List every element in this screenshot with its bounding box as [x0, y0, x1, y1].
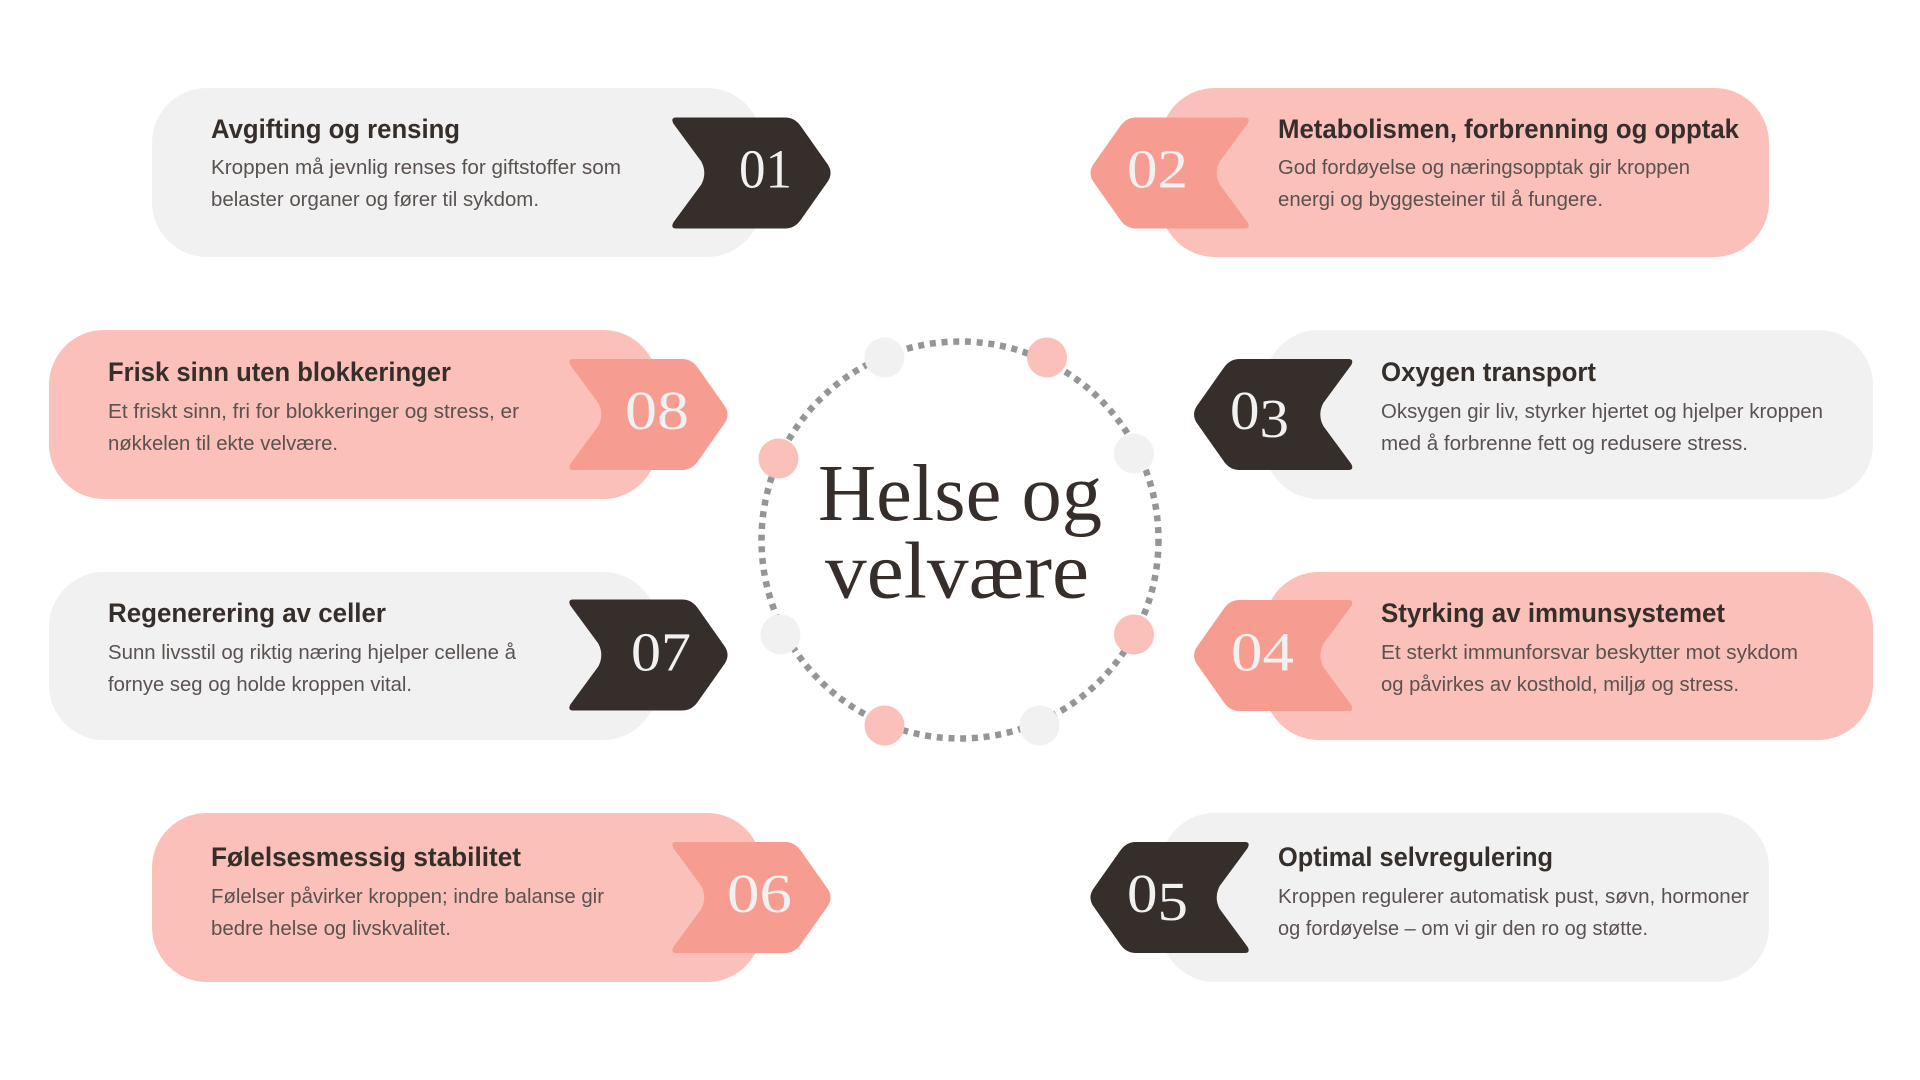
number: 5 — [1158, 871, 1188, 932]
card 02: Metabolismen — [1090, 88, 1769, 257]
number: 0 — [1230, 380, 1258, 441]
number: 0 — [1127, 863, 1154, 924]
pill — [152, 813, 762, 982]
pill — [1264, 572, 1873, 740]
number chevron — [1090, 118, 1249, 228]
ring node: gray top left — [864, 338, 904, 378]
heading: Følelsesmessig stabilitet — [211, 842, 521, 872]
ring node: pink bottom left — [864, 706, 904, 746]
heading: Avgifting og rensing — [211, 114, 460, 144]
number: 04 — [1231, 622, 1294, 682]
number chevron — [1194, 600, 1352, 711]
ring node: gray bottom right — [1020, 706, 1060, 746]
heading: Oxygen transport — [1381, 357, 1596, 387]
card 03: Oxygen transport — [1194, 330, 1873, 499]
pill — [152, 88, 762, 257]
heading: Styrking av immunsystemet — [1381, 598, 1725, 628]
heading: Frisk sinn uten blokkeringer — [108, 357, 451, 387]
number chevron — [569, 359, 728, 470]
number: 06 — [727, 863, 792, 924]
pill — [49, 330, 658, 499]
heading: Optimal selvregulering — [1278, 842, 1553, 872]
pill — [49, 572, 658, 740]
number: 07 — [631, 622, 691, 682]
description: belaster organer og fører til sykdom. — [211, 189, 539, 211]
description: Kroppen må jevnlig renses for giftstoffer som — [211, 157, 621, 179]
description: Et friskt sinn, fri for blokkeringer og stress, er — [108, 401, 519, 423]
heading: Regenerering av celler — [108, 598, 386, 628]
ring node: pink right lower — [1114, 614, 1154, 654]
title: velvære — [825, 528, 1089, 616]
title: Helse og — [818, 450, 1102, 538]
description: God fordøyelse og næringsopptak gir kroppen — [1278, 157, 1690, 179]
description: Følelser påvirker kroppen; indre balanse gir — [211, 886, 604, 908]
description: og fordøyelse – om vi gir den ro og støtte. — [1278, 918, 1648, 940]
card 06: Følelsesmessig stabilitet — [152, 813, 831, 982]
ring node: pink left upper — [758, 438, 798, 478]
ring node: gray left lower — [760, 614, 800, 654]
description: Et sterkt immunforsvar beskytter mot sykdom — [1381, 642, 1798, 664]
description: Oksygen gir liv, styrker hjertet og hjelper kroppen — [1381, 401, 1823, 423]
number: 01 — [739, 138, 792, 200]
number chevron — [1194, 359, 1352, 470]
card 05: Optimal selvregulering — [1090, 813, 1769, 982]
number: 02 — [1127, 138, 1188, 200]
card 01: Avgifting og rensing — [152, 88, 831, 257]
description: energi og byggesteiner til å fungere. — [1278, 189, 1603, 211]
dotted ring — [762, 342, 1158, 738]
card 07: Regenerering av celler — [49, 572, 728, 740]
pill — [1264, 330, 1873, 499]
number: 08 — [625, 380, 689, 441]
number chevron — [672, 842, 831, 953]
description: og påvirkes av kosthold, miljø og stress. — [1381, 674, 1739, 696]
pill — [1160, 88, 1769, 257]
number chevron — [672, 118, 831, 228]
ring node: gray right upper — [1114, 434, 1154, 474]
description: Sunn livsstil og riktig næring hjelper cellene å — [108, 642, 517, 664]
description: bedre helse og livskvalitet. — [211, 918, 451, 940]
pill — [1160, 813, 1769, 982]
description: Kroppen regulerer automatisk pust, søvn, hormoner — [1278, 886, 1749, 908]
number chevron — [1090, 842, 1249, 953]
description: med å forbrenne fett og redusere stress. — [1381, 433, 1748, 455]
heading: Metabolismen, forbrenning og opptak — [1278, 114, 1740, 144]
card 04: Styrking av immunsystemet — [1194, 572, 1873, 740]
number: 3 — [1260, 388, 1289, 449]
description: nøkkelen til ekte velvære. — [108, 433, 338, 455]
central circle with title — [758, 338, 1158, 746]
description: fornye seg og holde kroppen vital. — [108, 674, 412, 696]
card 08: Frisk sinn — [49, 330, 728, 499]
number chevron — [569, 600, 728, 710]
ring node: pink top right — [1027, 338, 1067, 378]
